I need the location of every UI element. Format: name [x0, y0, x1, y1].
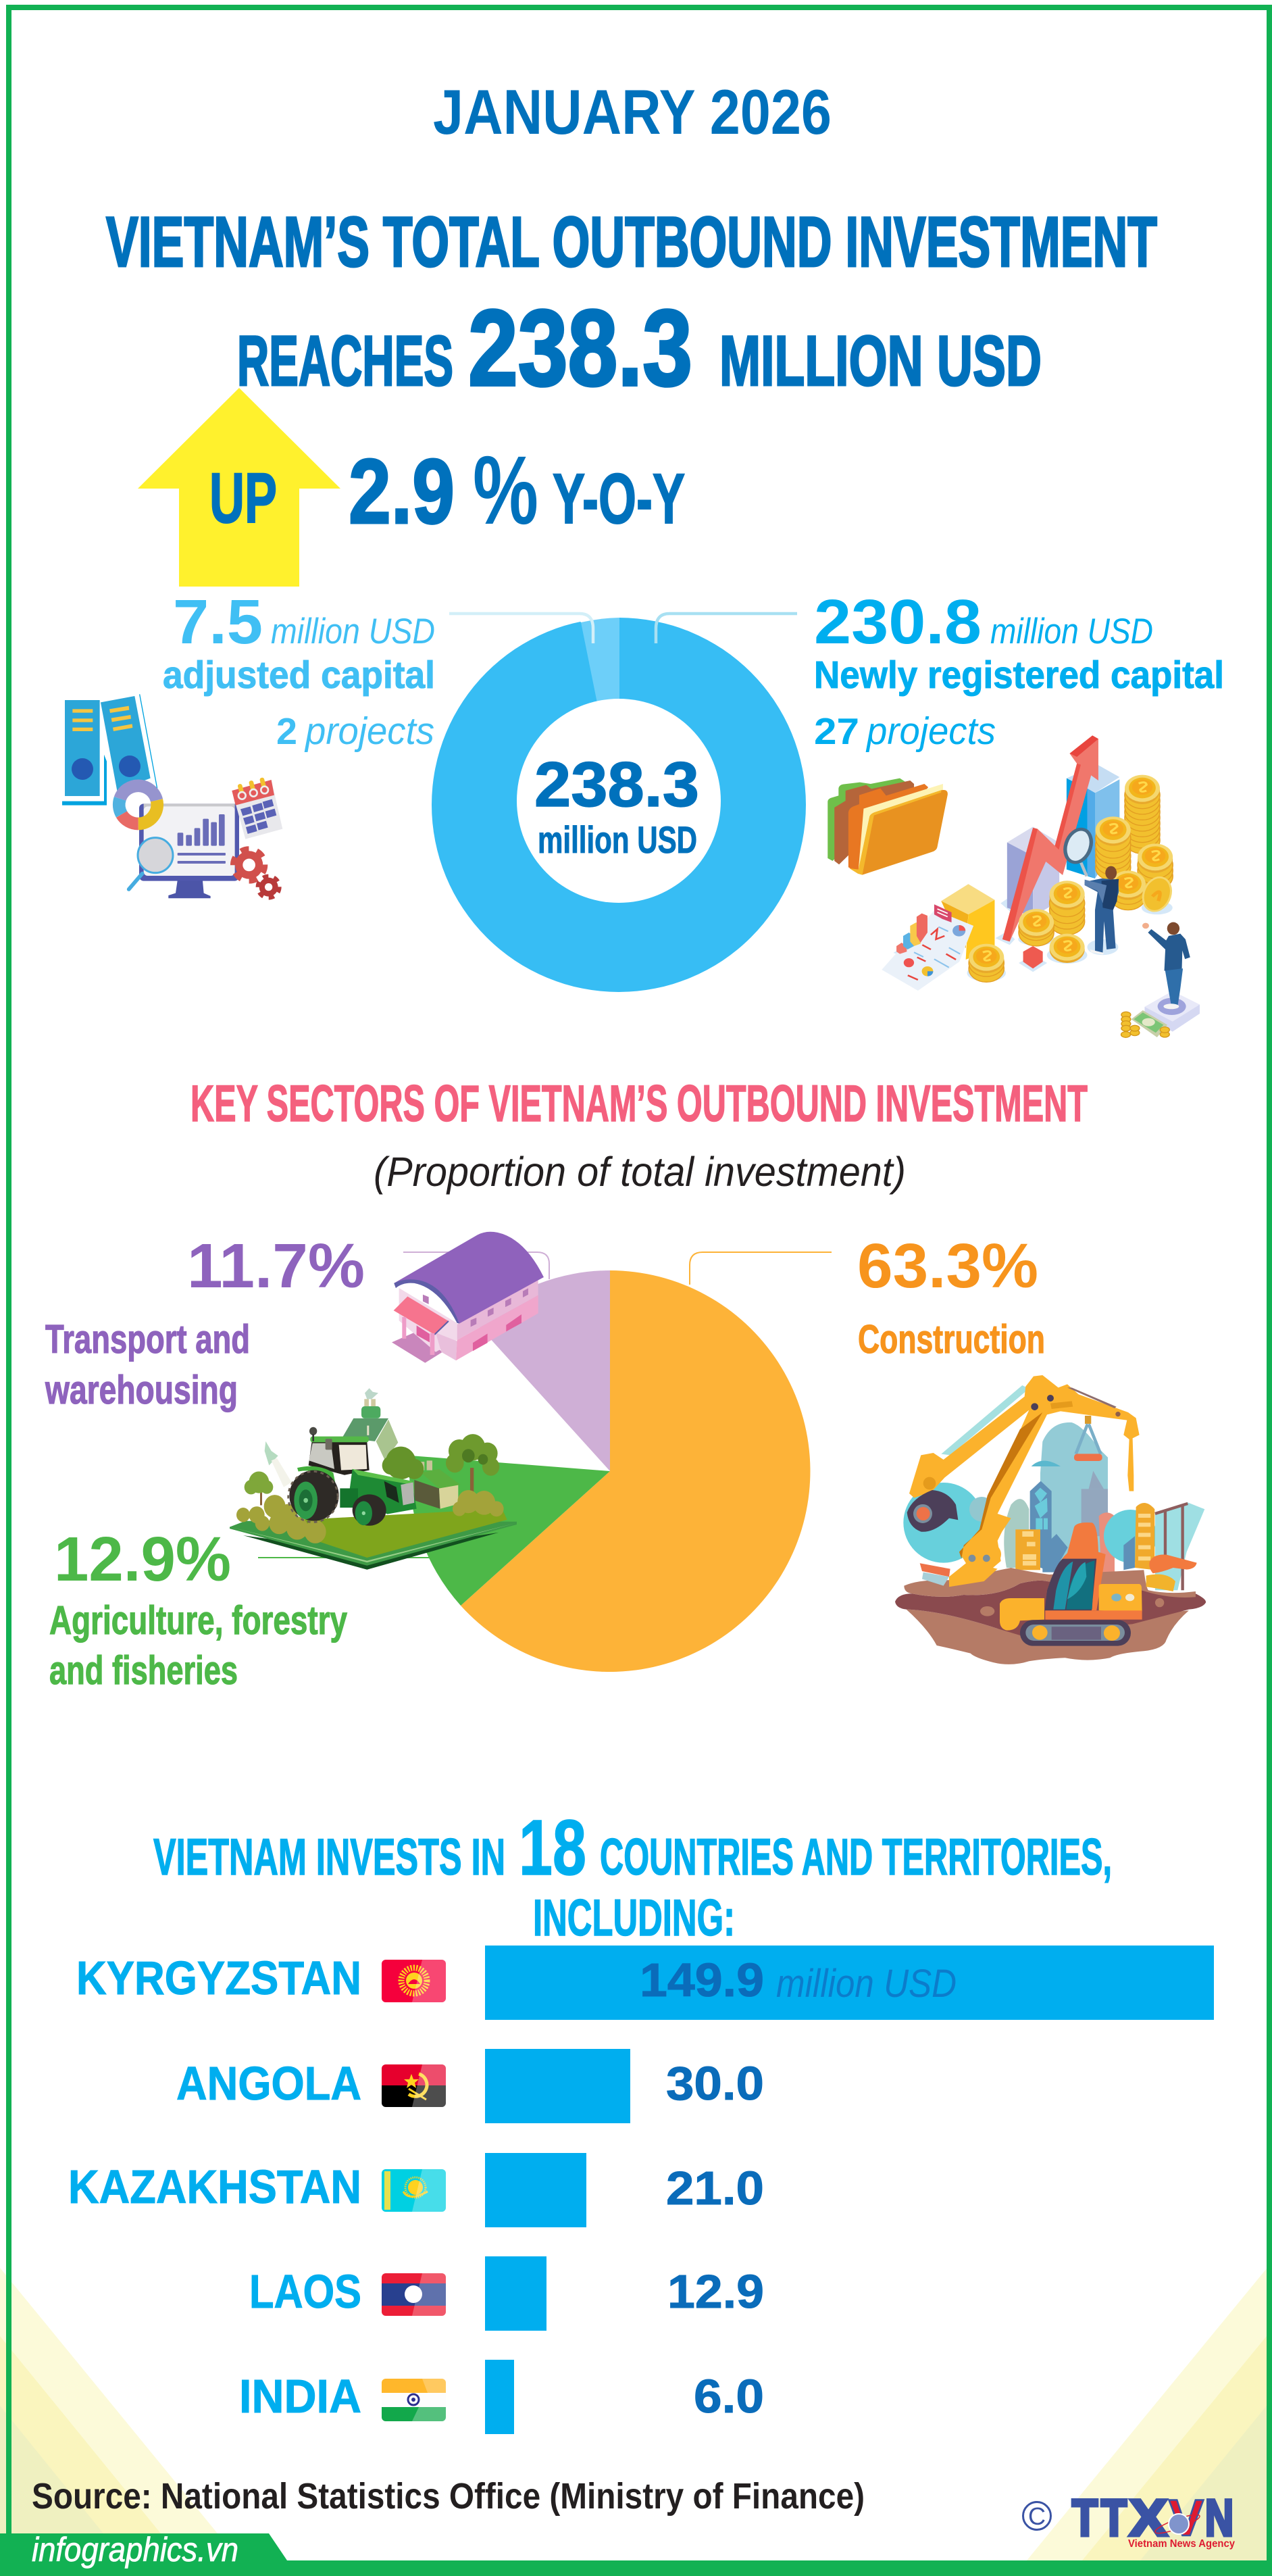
construction label: 63.3%	[857, 1231, 1038, 1301]
leader line: newly registered capital	[656, 614, 797, 643]
month heading: JANUARY 2026	[433, 76, 832, 147]
value: Angola: 30.0	[666, 2057, 764, 2110]
donut centre total	[534, 749, 699, 861]
construction label: Construction	[858, 1317, 1045, 1362]
donut centre total: million USD	[538, 818, 697, 861]
agriculture label: and fisheries	[49, 1648, 238, 1693]
transport label	[45, 1231, 365, 1412]
construction label	[857, 1231, 1045, 1362]
excavator cab	[1000, 1522, 1197, 1646]
purple column	[1007, 826, 1059, 856]
coin stack middle	[1096, 816, 1131, 881]
trees	[245, 1434, 499, 1505]
flag: Kyrgyzstan	[382, 1960, 446, 2002]
agriculture label: Agriculture, forestry	[49, 1598, 347, 1643]
city backdrop	[903, 1422, 1204, 1590]
title: MILLION USD	[719, 322, 1042, 401]
logo: TTXVN: T	[1101, 2490, 1127, 2547]
leader line: adjusted capital	[449, 614, 593, 643]
year-on-year change: 2.9	[349, 440, 455, 543]
logo: TTXVN: Vietnam News Agency	[1128, 2538, 1235, 2550]
logo: TTXVN: V	[1169, 2490, 1204, 2547]
bar: Angola	[485, 2049, 630, 2123]
row: Angola	[176, 2049, 764, 2123]
title	[106, 203, 1157, 408]
newly registered capital label: 27	[814, 710, 859, 752]
row: India	[239, 2360, 764, 2434]
country heading: VIETNAM INVESTS IN	[153, 1829, 505, 1886]
value: Kazakhstan: 21.0	[666, 2162, 764, 2214]
adjusted capital label: 2	[276, 710, 297, 752]
agriculture label	[49, 1524, 347, 1693]
website tab: infographics.vn	[32, 2531, 238, 2569]
rising arrow	[1002, 735, 1098, 941]
adjusted capital label: projects	[304, 710, 434, 753]
row: Laos	[249, 2256, 764, 2331]
ground	[895, 1568, 1206, 1664]
sector subheading: (Proportion of total investment)	[374, 1149, 906, 1195]
bar: Kazakhstan	[485, 2153, 586, 2227]
icon: tractor farm	[230, 1388, 517, 1570]
country heading: INCLUDING:	[533, 1889, 735, 1947]
row: Angola: ANGOLA	[176, 2057, 361, 2110]
icon: investment growth illustration	[882, 735, 1200, 1037]
leader line: construction	[690, 1252, 832, 1285]
year-on-year change	[349, 436, 685, 545]
value: India: 6.0	[694, 2370, 764, 2423]
man with magnifier	[1061, 826, 1119, 955]
logo: copyright: C	[1028, 2502, 1046, 2530]
adjusted capital label: 7.5	[173, 587, 263, 657]
yellow block and report	[882, 884, 1043, 991]
up arrow icon: UP	[209, 459, 277, 538]
donut chart	[432, 614, 806, 992]
flag: Kazakhstan	[382, 2169, 446, 2212]
bushes	[236, 1490, 504, 1543]
adjusted capital label: million USD	[271, 612, 435, 651]
logo: TTXVN	[1072, 2490, 1235, 2550]
tractor	[288, 1427, 417, 1526]
donut centre total: 238.3	[534, 749, 699, 820]
value: Kyrgyzstan: million USD	[776, 1962, 957, 2006]
website tab	[0, 2531, 287, 2576]
logo: TTXVN: N	[1205, 2490, 1233, 2547]
year-on-year change: Y-O-Y	[553, 460, 685, 539]
leader line: transport	[403, 1252, 549, 1279]
excavator arm	[907, 1375, 1140, 1587]
newly registered capital label: 230.8	[814, 587, 982, 657]
bar: Kyrgyzstan	[485, 1946, 1214, 2020]
transport label: 11.7%	[187, 1231, 365, 1301]
leader line: agriculture	[258, 1557, 430, 1558]
newly registered capital label: million USD	[990, 612, 1153, 651]
icon: warehouse	[392, 1232, 544, 1363]
logo: TTXVN: T	[1072, 2490, 1098, 2547]
icon: binders, monitor, chart	[62, 694, 282, 898]
newly registered capital label: projects	[865, 710, 996, 753]
coin stack centre	[1019, 881, 1085, 963]
man pointing on pedestal	[1121, 922, 1200, 1037]
title: REACHES	[237, 322, 453, 401]
newly registered capital label: Newly registered capital	[814, 653, 1224, 697]
year-on-year change: %	[473, 436, 538, 545]
source: Source: National Statistics Office (Ministry of Finance)	[32, 2476, 865, 2517]
row: India: INDIA	[239, 2370, 361, 2423]
icon: folders	[828, 778, 948, 875]
background corner decoration: left	[0, 2268, 218, 2533]
small barn	[414, 1460, 461, 1509]
bar: India	[485, 2360, 514, 2434]
adjusted capital label	[163, 587, 435, 753]
blue column	[1067, 765, 1119, 793]
country heading: 18	[519, 1804, 586, 1891]
agriculture label: 12.9%	[54, 1524, 231, 1594]
farm house	[342, 1388, 398, 1460]
title: 238.3	[468, 287, 692, 408]
transport label: Transport and	[45, 1317, 250, 1362]
coin stack right	[1111, 843, 1175, 914]
row: Kazakhstan: KAZAKHSTAN	[68, 2160, 361, 2213]
row: Laos: LAOS	[249, 2265, 361, 2318]
flag: Angola	[382, 2064, 446, 2107]
value: Laos: 12.9	[667, 2265, 764, 2318]
transport label: warehousing	[45, 1368, 238, 1412]
flag: Laos	[382, 2273, 446, 2316]
icon: excavator and city	[895, 1375, 1206, 1664]
background corner decoration: right	[1027, 2269, 1267, 2560]
flag: India	[382, 2379, 446, 2421]
logo: copyright	[1023, 2502, 1051, 2530]
adjusted capital label: adjusted capital	[163, 653, 435, 697]
shadows	[893, 899, 1173, 982]
up arrow icon	[138, 388, 340, 587]
logo: TTXVN: X	[1129, 2490, 1167, 2547]
newly registered capital label	[814, 587, 1224, 753]
row: Kazakhstan	[68, 2153, 764, 2227]
bar: Laos	[485, 2256, 546, 2331]
pie chart	[409, 1270, 810, 1672]
value: Kyrgyzstan: 149.9	[640, 1954, 764, 2006]
country heading	[153, 1804, 1112, 1947]
row: Kyrgyzstan: KYRGYZSTAN	[76, 1952, 361, 2004]
coin stack tall	[1125, 775, 1160, 853]
row: Kyrgyzstan	[76, 1946, 1214, 2020]
value: Kyrgyzstan	[640, 1954, 957, 2006]
